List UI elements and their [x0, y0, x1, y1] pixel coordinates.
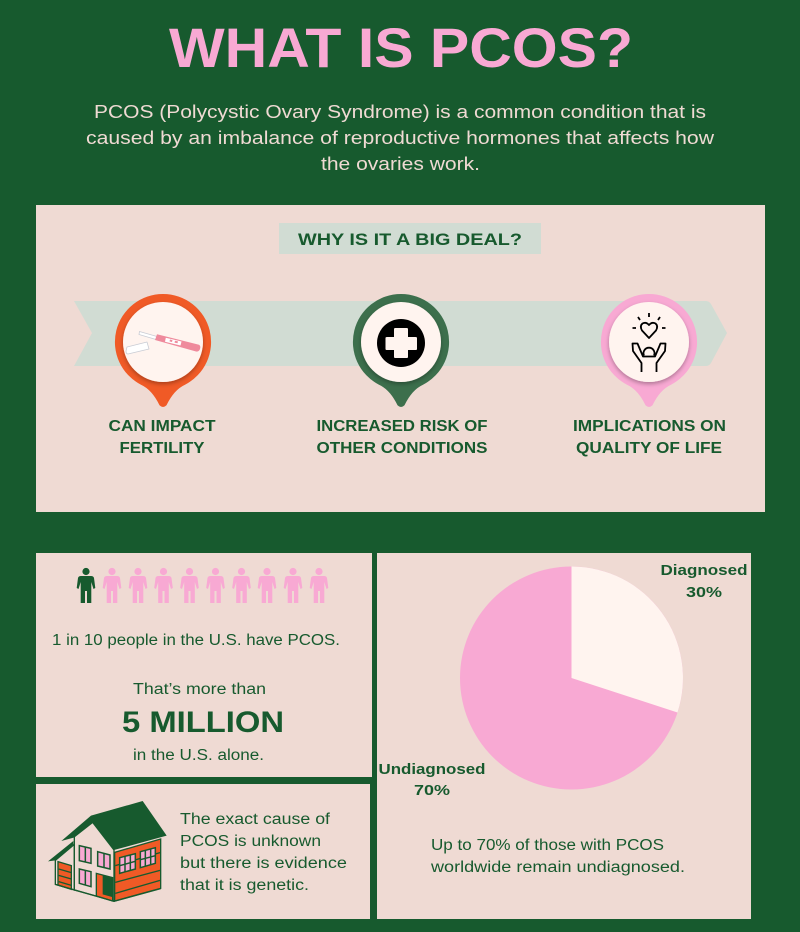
pie chart — [460, 566, 683, 790]
icon: pregnancy test pin — [115, 294, 211, 407]
cause text: The exact cause of — [180, 811, 331, 828]
panel: genetic cause — [36, 784, 370, 919]
ribbon arrow — [74, 301, 727, 366]
big number: 5 MILLION — [122, 706, 284, 739]
icon: heart and raised arms pin — [601, 294, 697, 407]
cause text: PCOS is unknown — [180, 833, 321, 850]
title: WHAT IS PCOS? — [169, 16, 633, 79]
caption — [430, 837, 685, 876]
label: quality of life: QUALITY OF LIFE — [576, 440, 722, 457]
label: undiagnosed: Undiagnosed — [378, 761, 486, 778]
intro text: caused by an imbalance of reproductive hormones that affects how — [86, 128, 715, 148]
label: other conditions: OTHER CONDITIONS — [316, 440, 488, 457]
stat text: 1 in 10 people in the U.S. have PCOS. — [52, 632, 340, 649]
intro text — [86, 102, 715, 174]
label: fertility: FERTILITY — [120, 440, 205, 457]
heading badge: WHY IS IT A BIG DEAL? — [298, 230, 522, 249]
caption: Up to 70% of those with PCOS — [431, 837, 664, 854]
label: quality of life — [573, 418, 726, 457]
panel: prevalence — [36, 553, 372, 777]
cause text — [180, 811, 347, 894]
panel: prevalence: That’s more than — [133, 681, 266, 698]
label: other conditions — [316, 418, 488, 457]
label: undiagnosed — [378, 761, 486, 799]
icon: house — [48, 801, 167, 901]
panel: prevalence: in the U.S. alone. — [133, 747, 264, 764]
label: diagnosed — [660, 562, 748, 601]
label: other conditions: INCREASED RISK OF — [316, 418, 488, 435]
intro text: PCOS (Polycystic Ovary Syndrome) is a common condition that is — [94, 102, 706, 122]
caption: worldwide remain undiagnosed. — [430, 859, 685, 876]
label: fertility: CAN IMPACT — [108, 418, 216, 435]
heading badge — [279, 223, 541, 254]
label: quality of life: IMPLICATIONS ON — [573, 418, 726, 435]
icon row: 1 in 10 people — [77, 568, 328, 603]
cause text: but there is evidence — [180, 855, 347, 872]
label: undiagnosed: 70% — [414, 782, 450, 799]
label: diagnosed: 30% — [686, 584, 722, 601]
label: diagnosed: Diagnosed — [660, 562, 748, 579]
panel: diagnosis pie chart — [377, 553, 751, 919]
panel: why is it a big deal — [36, 205, 765, 512]
label: fertility — [108, 418, 216, 457]
intro text: the ovaries work. — [321, 154, 480, 174]
cause text: that it is genetic. — [180, 877, 309, 894]
icon: medical cross pin — [353, 294, 449, 407]
